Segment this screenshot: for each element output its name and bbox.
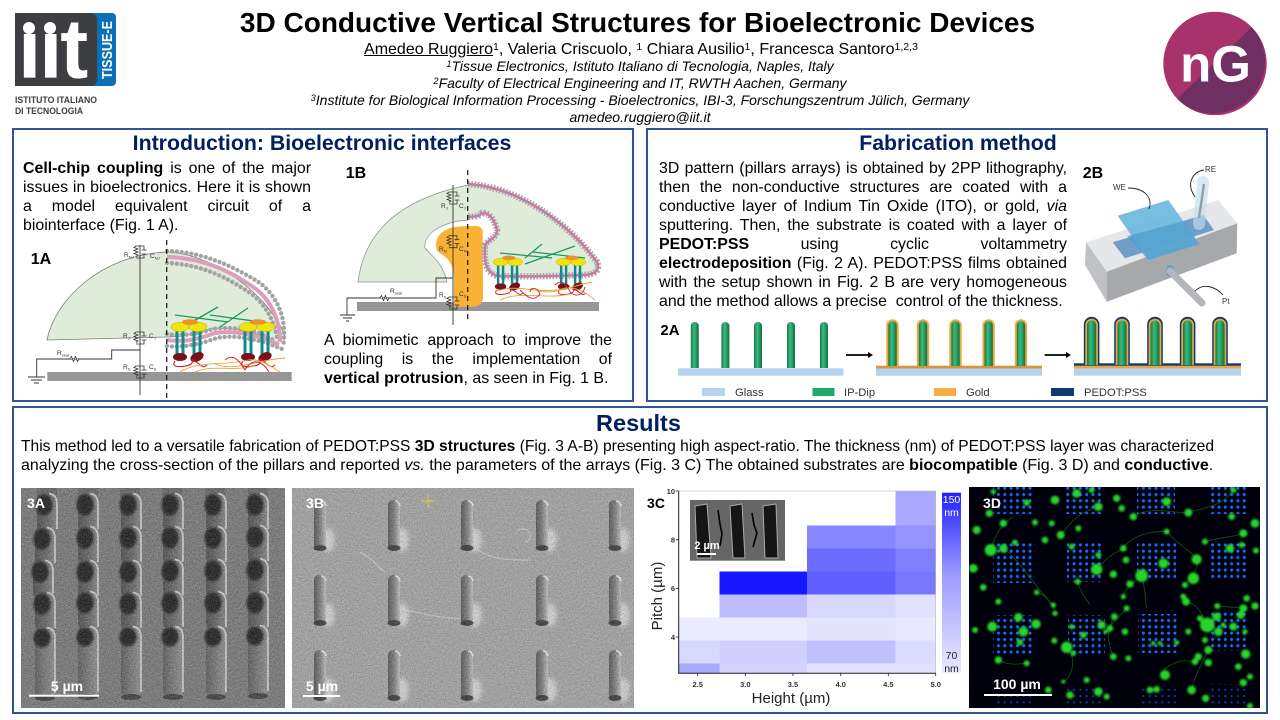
legend: Glass xyxy=(735,387,764,399)
inset SEM cross-section: 2 µm xyxy=(694,540,720,552)
figure 1A: cell interface circuit: NJ xyxy=(129,254,134,260)
legend: IP-Dip xyxy=(844,387,875,399)
panel: results xyxy=(12,406,1268,714)
text: fabrication description: 3D pattern (pillars arrays) is obtained by 2PP lithography, xyxy=(659,160,1067,176)
figure 3C: thickness heatmap: 3C xyxy=(647,495,665,511)
colour scale xyxy=(942,493,961,675)
panel: introduction xyxy=(12,128,634,402)
figure 2B: electrodeposition setup xyxy=(1083,165,1238,306)
figure 1B: vertical protrusion circuit: C xyxy=(459,246,464,253)
heading: introduction: Introduction: Bioelectronic interfaces xyxy=(133,131,511,155)
text: fabrication description: electrodeposition (Fig. 2 A). PEDOT:PSS films obtained xyxy=(659,255,1067,272)
text: fabrication description: and the method allows a precise control of the thickness. xyxy=(659,293,1063,310)
figure 1B: vertical protrusion circuit: 1B xyxy=(346,165,366,182)
figure 1A: cell interface circuit: C xyxy=(149,364,154,371)
figure 1B: vertical protrusion circuit xyxy=(340,165,602,325)
text: cell-chip coupling: issues in bioelectronics. Here it is shown xyxy=(23,179,311,196)
inset SEM cross-section xyxy=(690,500,785,561)
figure 1B: vertical protrusion circuit: R xyxy=(439,246,444,253)
text: fabrication description: then the non-conductive structures are coated with a xyxy=(659,179,1067,196)
figure 1A: cell interface circuit xyxy=(28,240,292,398)
figure 1A: cell interface circuit: C xyxy=(150,253,155,260)
figure 3C: thickness heatmap: 6 xyxy=(671,584,675,593)
arrow xyxy=(846,352,873,358)
figure 3C: thickness heatmap: 3.0 xyxy=(740,680,751,689)
figure 3C: thickness heatmap xyxy=(647,487,961,707)
text: results description: analyzing the cross-section of the pillars and reported vs. the parameters of the arrays (Fig. 3 C) The obtained substrates are biocompatible (Fig. 3 D) and conductive. xyxy=(21,457,1213,474)
figure 3D: fluorescence neurons on arrays: 3D xyxy=(983,495,1001,511)
figure 1B: vertical protrusion circuit: R xyxy=(390,288,395,295)
colour scale: 70 xyxy=(946,650,957,662)
figure 1A: cell interface circuit: S xyxy=(128,366,131,372)
legend: PEDOT:PSS xyxy=(1084,387,1147,399)
logo: IIT Tissue-E: ISTITUTO ITALIANO xyxy=(15,95,97,105)
heading: fabrication method: Fabrication method xyxy=(859,131,1057,155)
figure 3C: thickness heatmap: Pitch (µm) xyxy=(649,562,666,630)
figure 1B: vertical protrusion circuit: J xyxy=(464,206,466,210)
step 1: glass and IP-Dip pillars xyxy=(678,322,844,376)
logo: IIT Tissue-E: DI TECNOLOGIA xyxy=(15,106,83,116)
figure 2B: electrodeposition setup: 2B xyxy=(1083,165,1103,182)
colour scale: nm xyxy=(944,507,959,519)
figure 3A: SEM pillars dense xyxy=(21,488,285,708)
text: cell-chip coupling xyxy=(23,160,311,234)
figure 2B: electrodeposition setup: WE xyxy=(1113,183,1126,192)
figure 3C: thickness heatmap: 3.5 xyxy=(788,680,798,689)
figure 3B: SEM pillars sparse: 5 µm xyxy=(306,678,338,694)
text: fabrication description: PEDOT:PSS using cyclic voltammetry xyxy=(659,236,1067,253)
step 3: PEDOT:PSS coating xyxy=(1074,317,1241,376)
affiliation 3: 3Institute for Biological Information Processing - Bioelectronics, IBI-3, Forschungszentrum Jülich, Germany xyxy=(311,92,969,108)
figure 1B: vertical protrusion circuit: C xyxy=(459,203,464,210)
text: fabrication description: conductive layer of Indium Tin Oxide (ITO), or gold, via xyxy=(659,198,1067,215)
legend: Gold xyxy=(966,387,990,399)
figure 3C: thickness heatmap: 4.0 xyxy=(835,680,846,689)
logo: nG: nG xyxy=(1180,36,1251,92)
figure 1B: vertical protrusion circuit: S xyxy=(464,294,467,298)
figure 1A: cell interface circuit: R xyxy=(57,350,62,357)
text: cell-chip coupling: Cell-chip coupling is one of the major xyxy=(23,160,311,176)
title: 3D Conductive Vertical Structures for Bioelectronic Devices xyxy=(240,7,1035,38)
text: fabrication description xyxy=(659,160,1068,310)
colour scale: nm xyxy=(944,663,959,675)
figure 3C: thickness heatmap: Height (µm) xyxy=(752,690,830,707)
figure 1B: vertical protrusion circuit: C xyxy=(459,291,464,298)
logo: nG xyxy=(1163,12,1267,115)
figure 3C: thickness heatmap: 10 xyxy=(667,487,675,496)
figure 2B: electrodeposition setup: RE xyxy=(1205,165,1216,174)
text: fabrication description: with the setup shown in Fig. 2 B are very homogeneous xyxy=(659,274,1067,291)
figure 3B: SEM pillars sparse: 3B xyxy=(306,495,324,511)
text: fabrication description: sputtering. Then, the substrate is coated with a layer of xyxy=(659,217,1067,234)
figure 3A: SEM pillars dense: 3A xyxy=(27,495,45,511)
figure 3D: fluorescence neurons on arrays xyxy=(969,487,1260,708)
figure 1A: cell interface circuit: NJ xyxy=(155,256,160,260)
figure 3A: SEM pillars dense: 5 µm xyxy=(51,678,83,694)
logo: IIT Tissue-E: TISSUE-E xyxy=(100,21,116,79)
figure 1B: vertical protrusion circuit: R xyxy=(441,203,446,210)
figure 1A: cell interface circuit: R xyxy=(123,364,128,371)
figure 3C: thickness heatmap: 2.5 xyxy=(692,680,703,689)
affiliation 1: 1Tissue Electronics, Istituto Italiano di Tecnologia, Naples, Italy xyxy=(446,58,834,74)
figure 1A: cell interface circuit: C xyxy=(149,333,154,340)
figure 1B: vertical protrusion circuit: S xyxy=(444,294,447,300)
figure 1B: vertical protrusion circuit: N xyxy=(444,248,447,254)
figure 1A: cell interface circuit: seal xyxy=(62,352,69,358)
text: results description xyxy=(21,438,1214,474)
affiliation 2: 2Faculty of Electrical Engineering and IT, RWTH Aachen, Germany xyxy=(433,75,847,91)
figure 1B: vertical protrusion circuit: N xyxy=(464,248,467,254)
figure 2A: fabrication steps: 2A xyxy=(660,322,680,339)
text: biomimetic approach xyxy=(324,332,612,387)
text: cell-chip coupling: biointerface (Fig. 1 A). xyxy=(23,217,178,234)
colour scale: 150 xyxy=(943,494,960,506)
figure 3C: thickness heatmap: 5.0 xyxy=(930,680,941,689)
figure 1B: vertical protrusion circuit: R xyxy=(439,292,444,299)
figure 1B: vertical protrusion circuit: J xyxy=(446,206,448,210)
figure 3C: thickness heatmap: 8 xyxy=(671,536,675,544)
text: biomimetic approach: A biomimetic approach to improve the xyxy=(324,332,612,348)
text: cell-chip coupling: a model equivalent circuit of a xyxy=(23,198,311,215)
figure 1A: cell interface circuit: S xyxy=(154,366,157,372)
figure 1A: cell interface circuit: J xyxy=(128,336,130,340)
figure 2A: fabrication steps xyxy=(660,316,1241,399)
figure 1A: cell interface circuit: R xyxy=(123,333,128,340)
figure 3C: thickness heatmap: 4 xyxy=(671,633,676,642)
figure 3C: thickness heatmap: 4.5 xyxy=(883,680,894,689)
figure 1B: vertical protrusion circuit: seal xyxy=(395,290,402,296)
text: biomimetic approach: vertical protrusion, as seen in Fig. 1 B. xyxy=(324,370,608,387)
contact email: amedeo.ruggiero@iit.it xyxy=(569,109,711,125)
heatmap cells xyxy=(679,491,936,673)
legend xyxy=(702,387,1147,399)
figure 1A: cell interface circuit: J xyxy=(154,336,156,340)
arrow xyxy=(1045,352,1071,358)
figure 3D: fluorescence neurons on arrays: 100 µm xyxy=(993,676,1041,692)
figure 1A: cell interface circuit: 1A xyxy=(31,251,52,268)
panel: fabrication method xyxy=(646,128,1268,402)
text: biomimetic approach: coupling is the implementation of xyxy=(324,351,612,368)
figure 3B: SEM pillars sparse xyxy=(292,488,634,708)
authors: Amedeo Ruggiero1, Valeria Criscuolo, 1 Chiara Ausilio1, Francesca Santoro1,2,3 xyxy=(364,41,918,58)
logo: IIT Tissue-E xyxy=(15,13,116,116)
figure 1A: cell interface circuit: R xyxy=(124,252,129,259)
text: results description: This method led to a versatile fabrication of PEDOT:PSS 3D structures (Fig. 3 A-B) presenting high aspect-ratio. The thickness (nm) of PEDOT:PSS layer was characterized xyxy=(21,438,1214,455)
step 2: gold coating xyxy=(876,319,1042,376)
figure 2B: electrodeposition setup: Pt xyxy=(1222,297,1230,306)
heading: results: Results xyxy=(596,410,681,436)
